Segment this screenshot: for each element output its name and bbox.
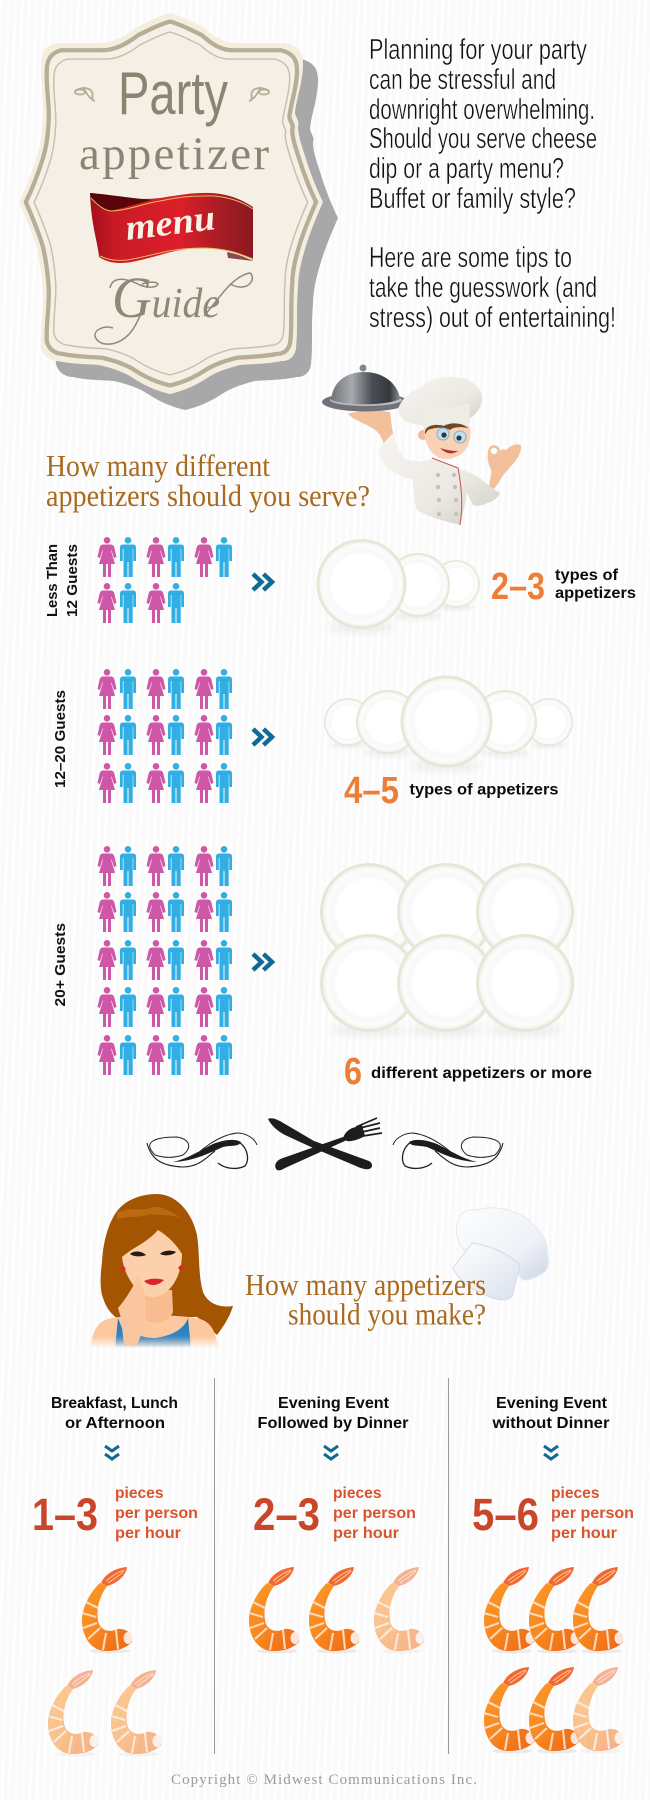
group: 12-20 guests [52, 669, 573, 812]
label: 12-20 guests: 12–20 Guests [52, 690, 69, 788]
value: 5-6 pieces per person per hour: pieces [551, 1485, 600, 1502]
copyright: Copyright © Midwest Communications Inc. [171, 1772, 477, 1788]
neck [142, 1290, 173, 1323]
flourish left [75, 87, 95, 101]
value: 5-6 pieces per person per hour: per hour [551, 1525, 617, 1542]
shoulders [91, 1315, 218, 1348]
plates: six [320, 863, 574, 1036]
value: 2-3 pieces per person per hour: 2–3 [253, 1489, 320, 1540]
swirl right [393, 1133, 503, 1168]
value: 2-3 types of appetizers [491, 566, 636, 608]
column: evening event followed by dinner [249, 1395, 424, 1654]
value: 2-3 pieces per person per hour: per hour [333, 1525, 399, 1542]
badge word: Guide: Guide [112, 265, 220, 330]
value: 2-3 pieces per person per hour: per person [333, 1505, 416, 1522]
swirl left [147, 1133, 257, 1168]
value: 2-3 types of appetizers: appetizers [555, 585, 636, 602]
value: 1-3 pieces per person per hour: per hour [115, 1525, 181, 1542]
column title [51, 1395, 178, 1432]
title badge: Party appetizer menu Guide [19, 13, 338, 410]
cloche [322, 364, 408, 412]
chef raised hand [348, 411, 394, 444]
label: less than 12 guests: 12 Guests [64, 544, 81, 617]
shrimp icons [484, 1567, 624, 1754]
hair highlight [117, 1207, 182, 1219]
badge drop shadow [34, 29, 338, 410]
column title: Evening Event [496, 1395, 607, 1412]
column dividers [214, 1378, 448, 1754]
blue top [115, 1318, 191, 1348]
hair [101, 1194, 233, 1335]
intro text [369, 34, 616, 334]
value: 4-5 types of appetizers: 4–5 [344, 770, 399, 812]
badge word: appetizer: appetizer [79, 128, 269, 180]
column: breakfast, lunch or afternoon [32, 1395, 198, 1756]
value: 4-5 types of appetizers [344, 770, 558, 812]
hand on chin [118, 1275, 146, 1345]
label: 20+ guests: 20+ Guests [52, 923, 69, 1006]
arrow [253, 954, 272, 970]
value: 1-3 pieces per person per hour: 1–3 [32, 1489, 98, 1540]
down arrow [544, 1446, 558, 1459]
shrimp icons [48, 1567, 162, 1756]
coat piping [432, 458, 462, 525]
column title [491, 1395, 610, 1432]
heading: how many different appetizers: How many different [46, 448, 270, 483]
people pictogram: 18 guests [98, 669, 232, 803]
down arrow [105, 1446, 119, 1459]
intro text: Here are some tips to [369, 242, 572, 274]
value: 4-5 types of appetizers: types of appetizers [410, 782, 558, 798]
value: 2-3 types of appetizers: types of [555, 567, 619, 584]
badge plaque [19, 13, 323, 394]
chef OK hand [488, 444, 521, 489]
red ribbon [90, 193, 253, 263]
value: 6 different appetizers or more [344, 1051, 592, 1093]
column title: Followed by Dinner [258, 1415, 408, 1432]
heading: how many appetizers [245, 1267, 486, 1332]
intro text: Buffet or family style? [369, 183, 576, 215]
badge word: Party: Party [118, 60, 228, 127]
group: less than 12 guests [44, 537, 636, 633]
value: 1-3 pieces per person per hour: pieces [115, 1485, 164, 1502]
label: less than 12 guests: Less Than [44, 544, 61, 617]
label: less than 12 guests [44, 544, 81, 617]
chef hat [398, 377, 482, 428]
value: 6 different appetizers or more: different appetizers or more [371, 1065, 592, 1082]
plates: three [316, 539, 480, 633]
column title: Evening Event [278, 1395, 389, 1412]
value: 5-6 pieces per person per hour: per person [551, 1505, 634, 1522]
people pictogram: 30 guests [98, 846, 232, 1075]
badge word: Guide [95, 265, 252, 344]
fork [275, 1118, 382, 1170]
heading: how many different appetizers: appetizers should you serve? [46, 478, 370, 513]
chef coat buttons [436, 473, 458, 516]
knife [268, 1118, 372, 1169]
value: 6 different appetizers or more: 6 [344, 1051, 362, 1093]
group: 20+ guests [52, 846, 592, 1093]
column title: without Dinner [491, 1415, 610, 1432]
value: 2-3 types of appetizers: 2–3 [491, 566, 545, 608]
value: 1-3 pieces per person per hour [32, 1485, 198, 1542]
divider: crossed knife and fork with swirls [147, 1118, 503, 1170]
shrimp icons [249, 1567, 424, 1654]
chef coat [378, 433, 500, 525]
value: 1-3 pieces per person per hour: per person [115, 1505, 198, 1522]
heading: how many appetizers: How many appetizers [245, 1267, 486, 1302]
plates: five [324, 676, 573, 771]
red ribbon: menu [123, 197, 217, 248]
intro text: can be stressful and [369, 64, 556, 96]
value: 5-6 pieces per person per hour [472, 1485, 634, 1542]
arrow [253, 574, 272, 590]
flourish right [249, 87, 269, 101]
down arrow [324, 1446, 338, 1459]
illustration: chef with cloche [322, 364, 521, 525]
value: 5-6 pieces per person per hour: 5–6 [472, 1489, 539, 1540]
value: 2-3 pieces per person per hour [253, 1485, 416, 1542]
face [120, 1230, 184, 1297]
column title: Breakfast, Lunch [51, 1395, 178, 1412]
people pictogram: 10 guests [98, 537, 232, 623]
arrow [253, 729, 272, 745]
column: evening event without dinner [472, 1395, 634, 1754]
column title [258, 1395, 408, 1432]
intro text: dip or a party menu? [369, 153, 564, 185]
chef head [418, 423, 470, 459]
illustration: thinking woman [91, 1194, 233, 1348]
heading: how many different appetizers [46, 448, 370, 513]
value: 2-3 pieces per person per hour: pieces [333, 1485, 382, 1502]
heading: how many appetizers: should you make? [288, 1296, 486, 1332]
column title: or Afternoon [65, 1415, 165, 1432]
illustration: white chef hat [453, 1208, 548, 1300]
